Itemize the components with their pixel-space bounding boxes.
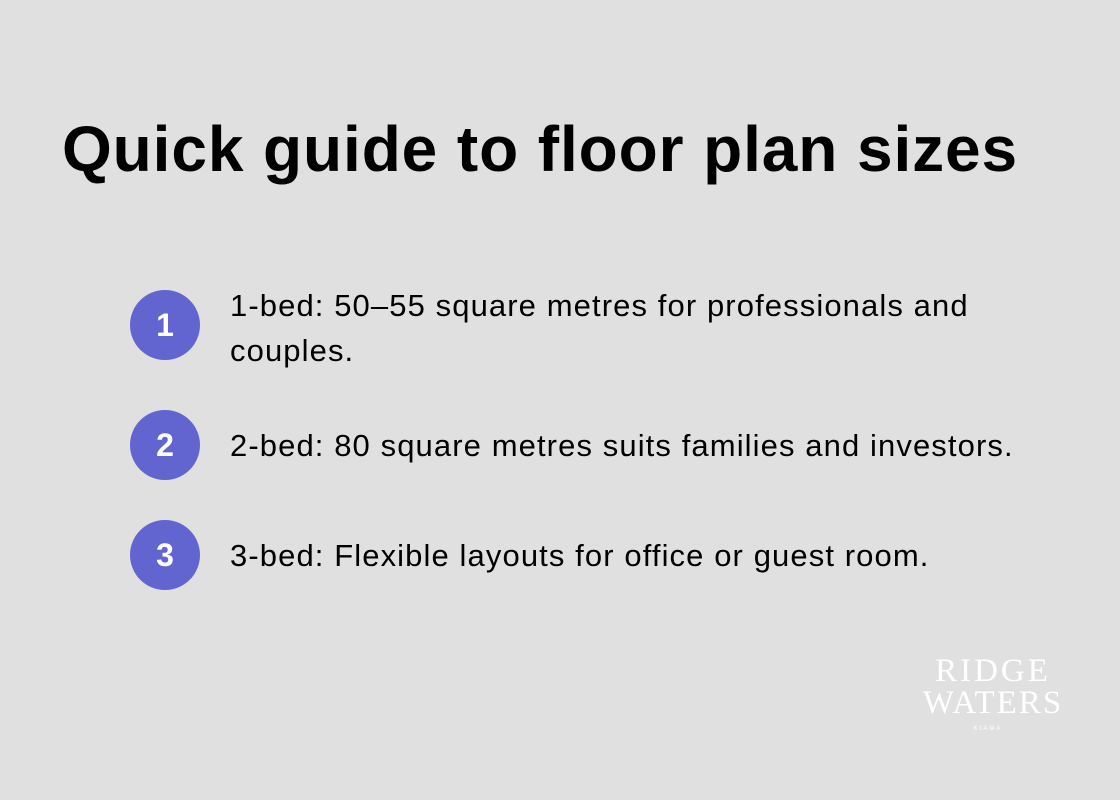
icon: number 3 xyxy=(130,520,200,590)
logo: KIAMA xyxy=(974,726,1002,732)
item 3 xyxy=(130,520,929,590)
text 1: 1-bed: 50–55 square metres for professionals and couples. xyxy=(230,288,969,368)
title: Quick guide to floor plan sizes xyxy=(62,113,1018,185)
icon: number 3: 3 xyxy=(156,537,174,573)
text 3: 3-bed: Flexible layouts for office or guest room. xyxy=(230,538,929,573)
item 1 xyxy=(130,288,969,368)
logo xyxy=(923,653,1063,732)
icon: number 1 xyxy=(130,290,200,360)
icon: number 2 xyxy=(130,410,200,480)
text 2: 2-bed: 80 square metres suits families and investors. xyxy=(230,428,1014,463)
icon: number 1: 1 xyxy=(156,307,174,343)
item 2 xyxy=(130,410,1014,480)
icon: number 2: 2 xyxy=(156,427,174,463)
logo: WATERS xyxy=(923,685,1063,721)
logo: RIDGE xyxy=(935,653,1051,689)
